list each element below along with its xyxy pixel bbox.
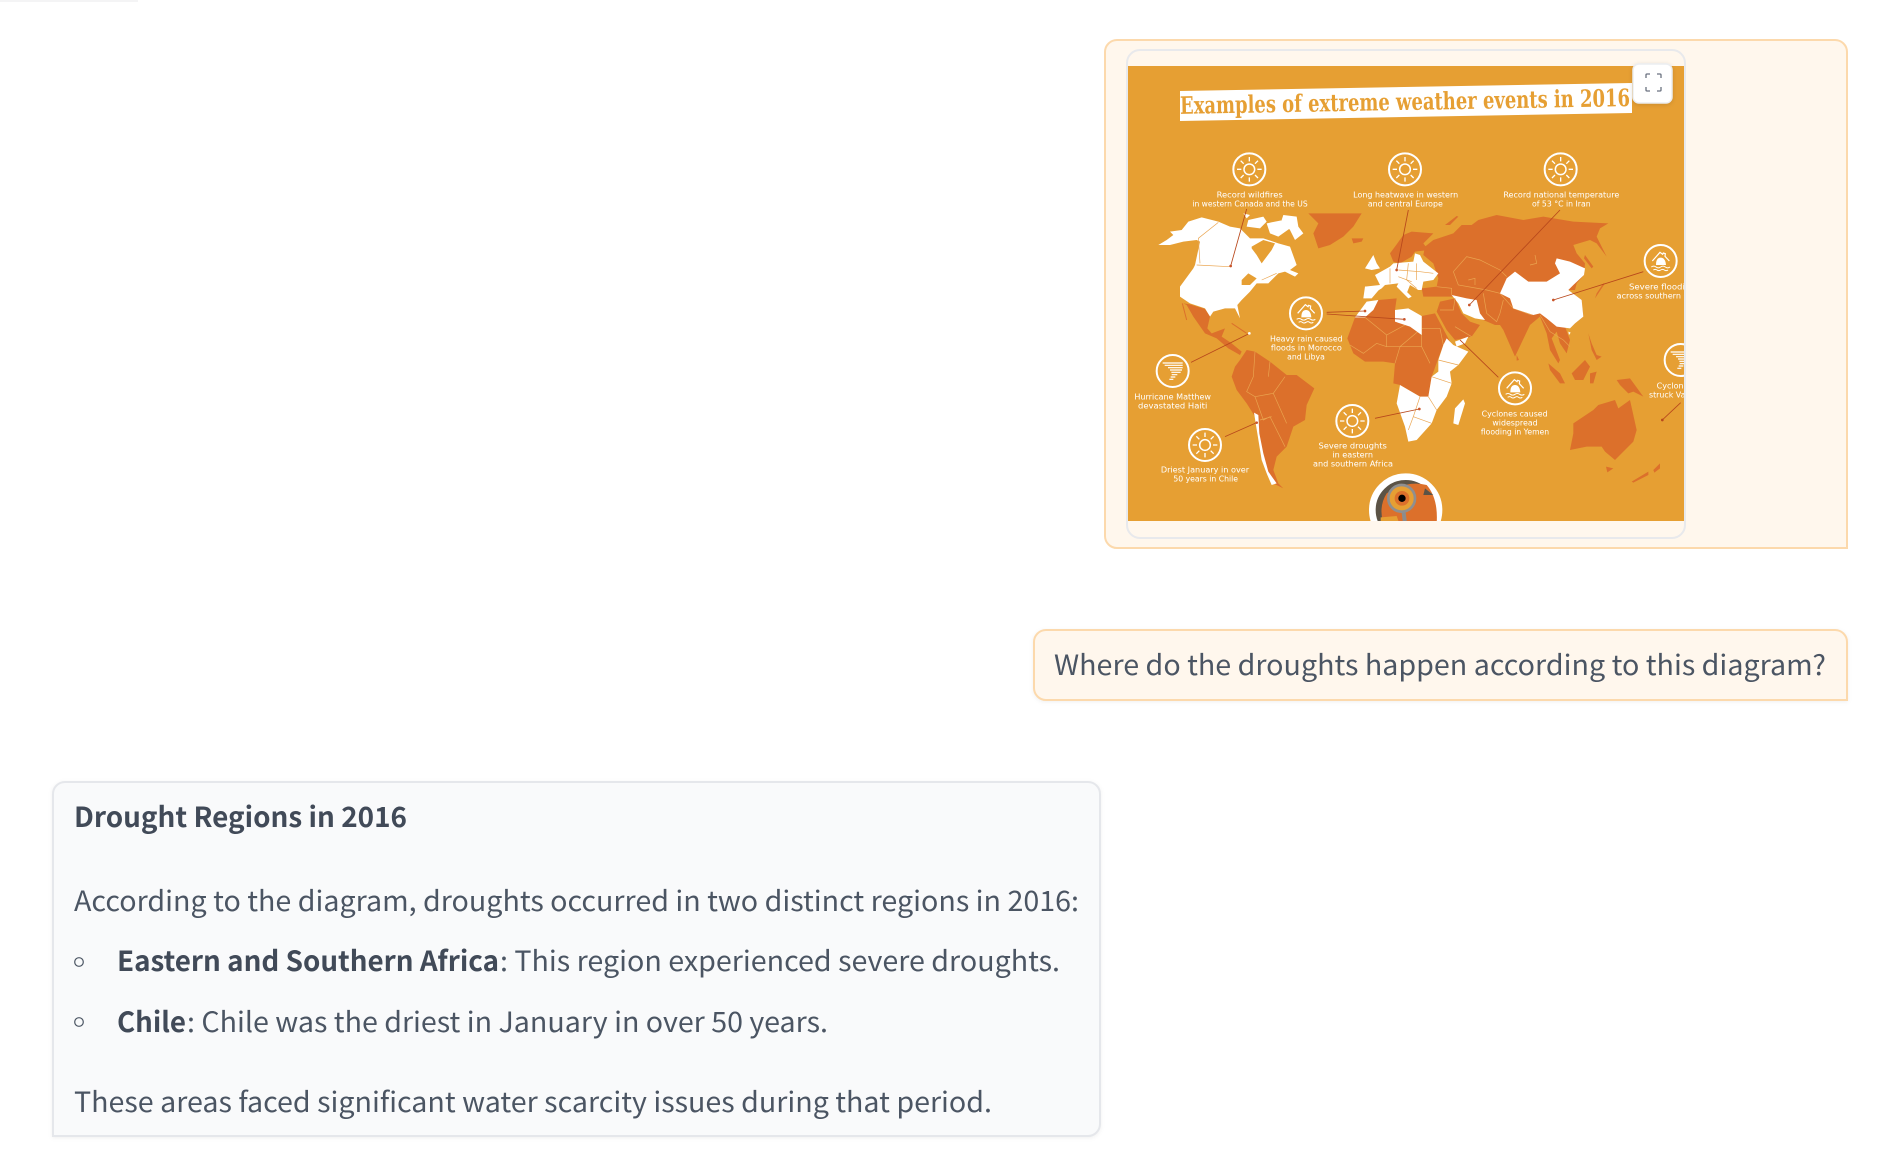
callout: driest january: Driest January in over <box>1161 466 1250 475</box>
south america <box>1232 350 1314 488</box>
leader lines <box>1191 209 1681 437</box>
callout: heavy rain <box>1270 297 1343 362</box>
china <box>1500 258 1585 328</box>
eurasia <box>1422 215 1643 397</box>
callout: long heatwave: Long heatwave in western <box>1353 190 1458 199</box>
morocco <box>1355 300 1378 317</box>
callout: record wildfires <box>1192 153 1308 208</box>
callout: cyclones yemen: flooding in Yemen <box>1481 428 1549 437</box>
callout: hurricane matthew: Hurricane Matthew <box>1134 392 1211 401</box>
callout: severe flooding: across southern China <box>1617 291 1707 300</box>
expand button <box>1633 64 1672 103</box>
callout: cyclones yemen: Cyclones caused <box>1482 410 1548 419</box>
callout: driest january <box>1161 429 1250 484</box>
callout: record temperature: of 53 °C in Iran <box>1532 199 1591 208</box>
world map <box>1135 152 1684 521</box>
callout: severe droughts: and southern Africa <box>1313 460 1393 469</box>
libya <box>1395 308 1422 335</box>
image frame <box>1127 50 1685 538</box>
callout: hurricane matthew: devastated Haiti <box>1138 401 1207 410</box>
callout: record wildfires: in western Canada and the US <box>1192 199 1308 208</box>
callout: severe droughts <box>1313 405 1393 469</box>
panel: user question bubble <box>1034 630 1847 700</box>
callout: severe flooding: Severe flooding <box>1629 282 1696 291</box>
panel: assistant answer <box>53 782 1100 1136</box>
callout: heavy rain: and Libya <box>1287 353 1325 362</box>
callout: record temperature: Record national temperature <box>1503 190 1620 199</box>
bullet: eastern and southern africa <box>75 940 1060 980</box>
callout: cyclone vanuatu: Cyclone Winston <box>1657 381 1723 390</box>
iceland <box>1352 238 1363 243</box>
arabia <box>1437 298 1480 340</box>
magnifying glass badge <box>1369 473 1442 521</box>
callout: record wildfires: Record wildfires <box>1217 190 1283 199</box>
closing sentence: These areas faced significant water scarcity issues during that period. <box>74 1081 992 1121</box>
panel: user image message <box>1105 40 1847 548</box>
bullet: eastern and southern africa: Eastern and Southern Africa <box>117 940 499 980</box>
iran <box>1452 295 1485 320</box>
callout: severe droughts: Severe droughts <box>1318 442 1387 451</box>
north america <box>1158 213 1303 355</box>
callout: cyclone vanuatu: struck Vanuatu <box>1649 390 1708 399</box>
top edge shadow strip <box>0 0 138 2</box>
card background <box>1105 40 1847 548</box>
greenland <box>1308 213 1362 248</box>
callout: cyclones yemen <box>1481 372 1549 437</box>
callout: long heatwave <box>1353 153 1458 208</box>
callout: severe flooding <box>1617 244 1684 298</box>
callout: cyclones yemen: widespread <box>1492 419 1538 428</box>
callout: long heatwave: and central Europe <box>1368 199 1443 208</box>
callout: heavy rain: Heavy rain caused <box>1270 335 1343 344</box>
callout: record temperature <box>1503 153 1620 208</box>
answer heading: Drought Regions in 2016 <box>74 796 407 836</box>
callout: severe droughts: in eastern <box>1332 451 1373 460</box>
africa north <box>1347 298 1450 397</box>
map title banner <box>1180 83 1632 121</box>
intro sentence: According to the diagram, droughts occurred in two distinct regions in 2016: <box>74 880 1079 920</box>
map title banner: Examples of extreme weather events in 2016 <box>1180 83 1630 120</box>
infographic: world map of extreme weather events <box>1128 66 1684 521</box>
callout: hurricane matthew <box>1134 355 1211 410</box>
bullet: eastern and southern africa: : This region experienced severe droughts. <box>500 940 1060 980</box>
bullet: chile: Chile <box>117 1001 186 1041</box>
bullet: chile: : Chile was the driest in January in over 50 years. <box>187 1001 828 1041</box>
question text: Where do the droughts happen according to this diagram? <box>1054 644 1826 684</box>
europe, north africa and middle east <box>1347 232 1485 397</box>
australia and new zealand <box>1570 400 1660 483</box>
callout: driest january: 50 years in Chile <box>1173 475 1238 484</box>
callout: heavy rain: floods in Morocco <box>1271 344 1342 353</box>
east and southern africa <box>1397 337 1468 442</box>
callout: cyclone vanuatu <box>1649 343 1684 398</box>
